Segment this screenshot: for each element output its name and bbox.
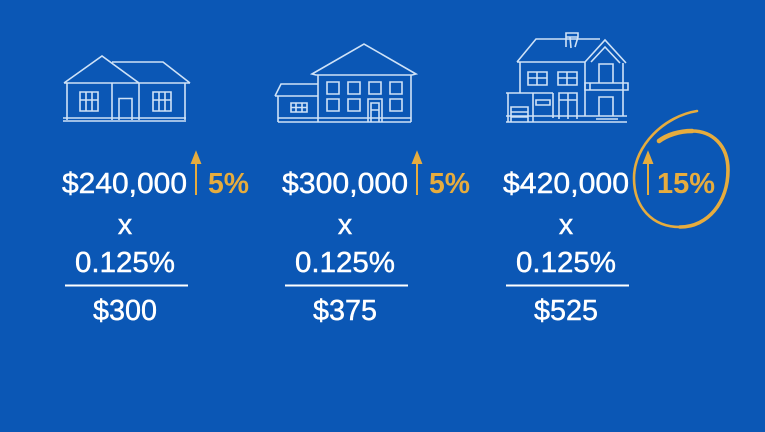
arrow 1: [192, 153, 200, 195]
rate 3: 0.125%: [516, 247, 616, 279]
result 2: $375: [313, 295, 377, 327]
icon: single-storey house: [63, 56, 190, 121]
icon: two-storey house with wing: [275, 44, 416, 122]
column 3 price: $420,000: [503, 168, 629, 200]
divider 1: [65, 284, 188, 286]
rate 1: 0.125%: [75, 247, 175, 279]
multiply sign 3: x: [559, 209, 573, 241]
divider 2: [285, 284, 408, 286]
5% increase 1: 5%: [208, 168, 249, 200]
icon: large detached house: [506, 33, 628, 122]
divider 3: [506, 284, 629, 286]
15% increase: 15%: [657, 168, 715, 200]
multiply sign 1: x: [118, 209, 132, 241]
column 2 price: $300,000: [282, 168, 408, 200]
arrow 3: [644, 153, 652, 195]
5% increase 2: 5%: [429, 168, 470, 200]
rate 2: 0.125%: [295, 247, 395, 279]
column 1 price: $240,000: [62, 168, 187, 200]
arrow 2: [413, 153, 421, 195]
result 1: $300: [93, 295, 157, 327]
result 3: $525: [534, 295, 598, 327]
multiply sign 2: x: [338, 209, 352, 241]
hand-drawn circle around 15%: [634, 111, 728, 227]
